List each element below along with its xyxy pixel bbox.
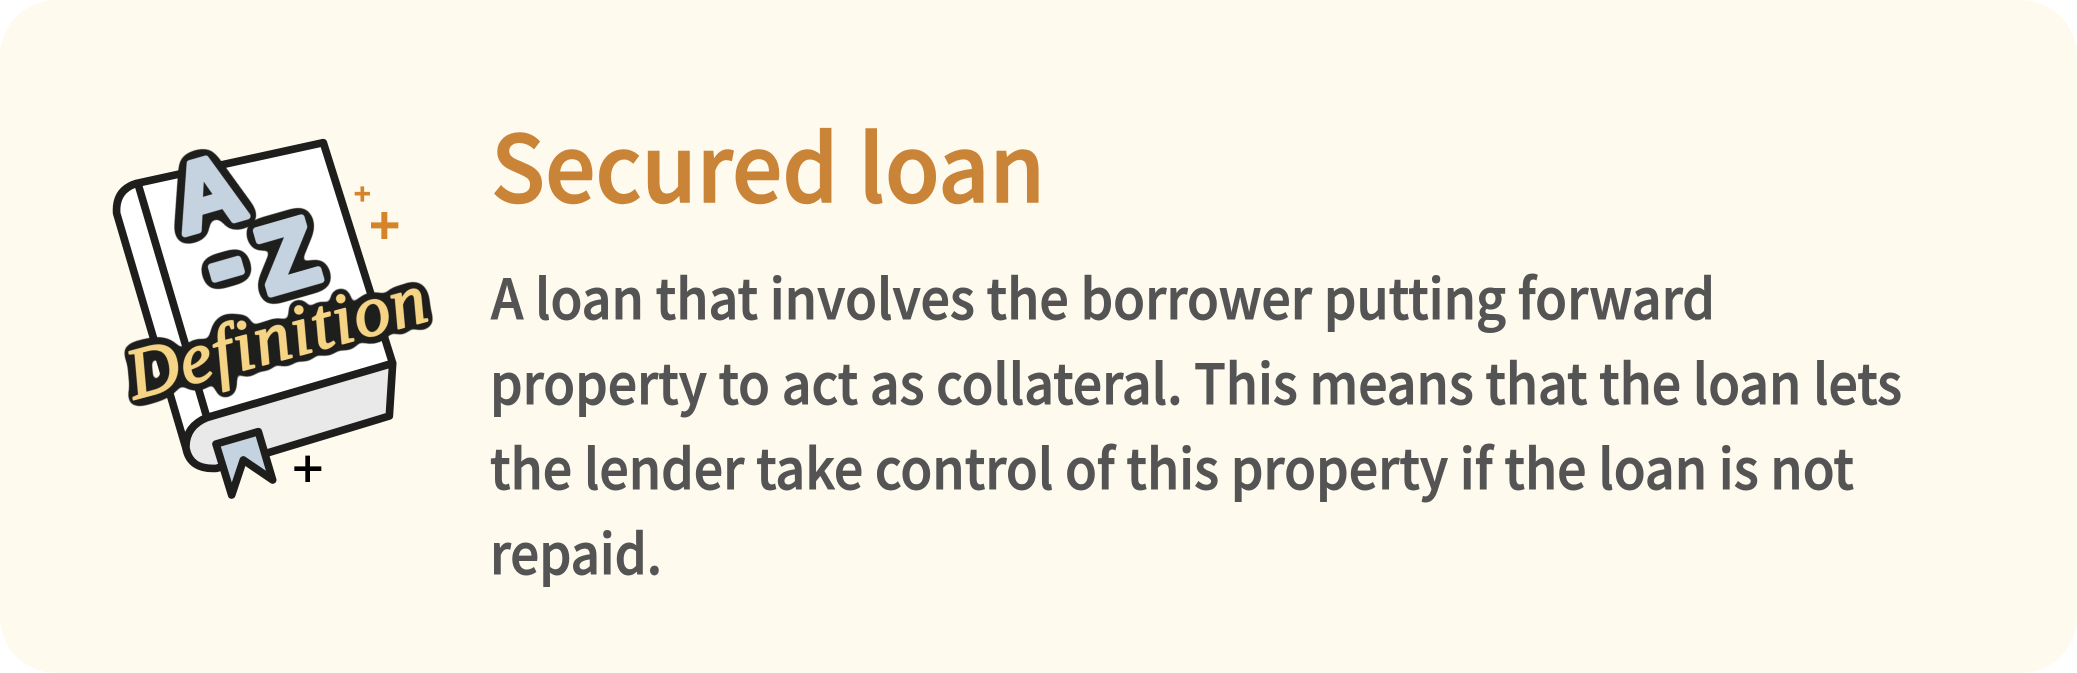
- sparkle: black plus: [294, 456, 321, 482]
- icon: definition book: [117, 132, 435, 495]
- sparkle: large orange plus: [371, 212, 398, 239]
- body line 1: A loan that involves the borrower putting forward: [491, 255, 1715, 335]
- bookmark: [216, 432, 273, 495]
- book spine line: [138, 185, 207, 417]
- hyphen: -: [189, 196, 259, 325]
- book cover: [117, 143, 393, 448]
- body line 2: property to act as collateral. This means that the loan lets: [490, 340, 1902, 420]
- book pages: [186, 363, 393, 468]
- title: Secured loan: [491, 96, 1045, 229]
- body line 4: repaid.: [490, 510, 662, 590]
- letter Z: Z: [245, 197, 330, 315]
- body line 3: the lender take control of this property if the loan is not: [490, 425, 1854, 505]
- body text: [490, 255, 1902, 590]
- letter A: A: [159, 132, 256, 255]
- sparkle: small orange plus: [355, 186, 370, 202]
- script word Definition: Definition: [117, 258, 435, 415]
